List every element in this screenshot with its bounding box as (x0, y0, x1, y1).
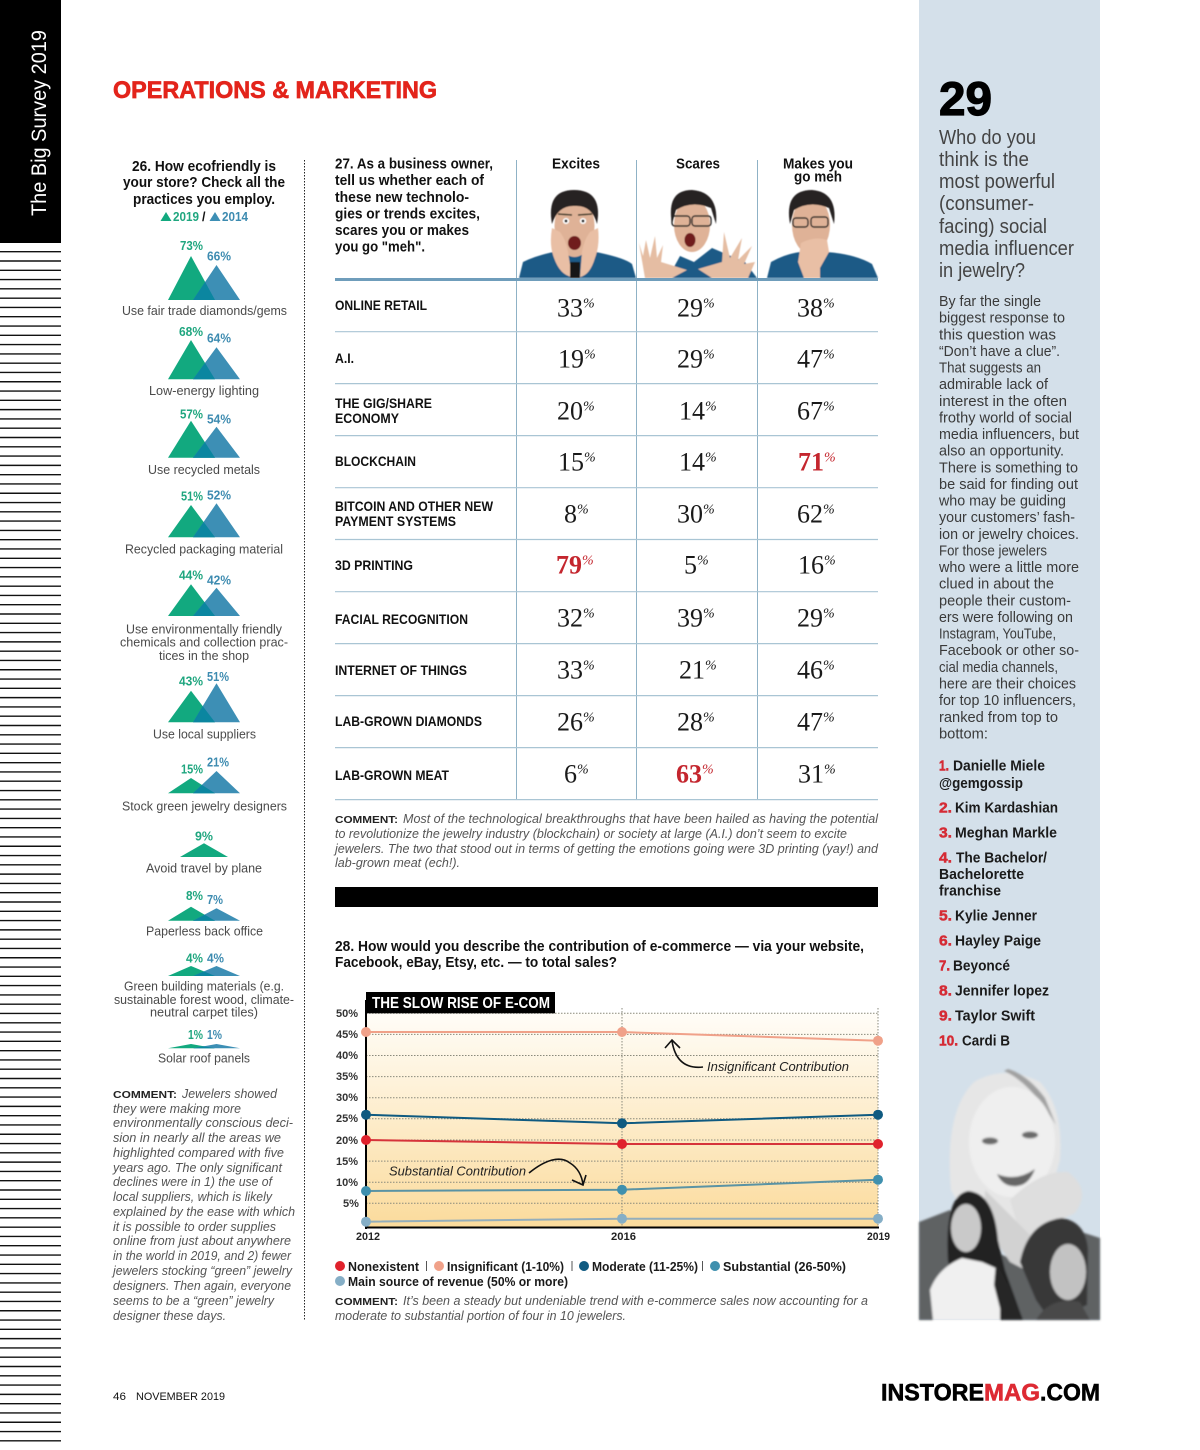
ranked list of influencers: @gemgossip (939, 776, 1023, 792)
item: paperless office: Paperless back office (146, 923, 263, 938)
side tab: The Big Survey 2019: The Big Survey 2019 (28, 30, 51, 216)
ranked list of influencers: 4. (939, 851, 952, 867)
comment: question 26: years ago. The only significant (112, 1160, 283, 1175)
heading: question 28: 28. How would you describe the contribution of e-commerce — via your website, (335, 938, 864, 955)
second portrait (947, 1191, 1023, 1320)
heading: question 27 (335, 156, 493, 256)
series: nonexistent (361, 1135, 883, 1149)
item: green building materials: 4% (186, 951, 203, 966)
sidebar question: in jewelry? (939, 260, 1025, 282)
comment: question 28: COMMENT: (335, 1296, 398, 1308)
series: substantial (361, 1175, 883, 1196)
row: gig economy: ECONOMY (335, 410, 400, 426)
chart legend: Moderate (11-25%) (592, 1259, 698, 1274)
x axis labels: 2012 (356, 1231, 380, 1243)
ranked list of influencers: 9. (939, 1009, 952, 1025)
row: online retail: ONLINE RETAIL (335, 297, 427, 313)
comment: question 26: in the world in 2019, and 2) fewer (113, 1248, 292, 1263)
item: recycled metals: 54% (207, 411, 231, 426)
sidebar body text: clued in about the (939, 577, 1054, 593)
item: green jewelry designers: 15% (181, 761, 203, 776)
sidebar body text: your customers’ fash- (939, 510, 1075, 526)
row: A.I.: % (703, 348, 715, 362)
ranked list of influencers: Danielle Miele (953, 759, 1045, 775)
row: facial recognition: 29 (797, 604, 823, 632)
item: fair trade: 73% (180, 238, 203, 253)
sidebar body text: also an opportunity. (939, 444, 1064, 460)
item: eco-friendly chemicals: chemicals and collection prac- (120, 635, 288, 650)
row: gig economy: 67 (797, 396, 823, 426)
item: low-energy lighting: 64% (207, 331, 231, 346)
ranked list of influencers: Hayley Paige (955, 934, 1041, 950)
panel: question 26 eco practices (111, 158, 295, 1323)
ranked list of influencers: 2. (939, 801, 952, 817)
comment: question 27: to revolutionize the jewelry industry (blockchain) or society at large (A.I.) don’t seem to excite (335, 826, 847, 841)
item: recycled metals: 57% (180, 406, 203, 421)
ranked list of influencers: 3. (939, 826, 952, 842)
sidebar body text: this question was (939, 327, 1056, 343)
row: lab-grown diamonds: 26 (557, 708, 583, 736)
item: low-energy lighting: Low-energy lighting (149, 383, 259, 398)
annotation: substantial contribution: Substantial Contribution (389, 1164, 526, 1178)
row: online retail: % (703, 296, 715, 312)
row: 3D printing: % (824, 554, 836, 568)
sidebar body text: biggest response to (939, 311, 1065, 327)
sidebar question: most powerful (939, 171, 1055, 193)
row: lab-grown meat: LAB-GROWN MEAT (335, 767, 449, 783)
row: blockchain: BLOCKCHAIN (335, 453, 416, 469)
row: gig economy: THE GIG/SHARE (335, 395, 432, 411)
sidebar body text: who were a little more (938, 560, 1079, 576)
top portrait face (969, 1087, 1055, 1197)
row: online retail: 29 (677, 294, 703, 322)
comment: question 26: declines were in 1) the use of (113, 1174, 273, 1189)
sidebar body text: ranked from top to (939, 710, 1058, 726)
y axis labels: 5% (343, 1198, 359, 1210)
row: A.I.: % (823, 348, 835, 362)
item: eco-friendly chemicals: tices in the shop (159, 648, 249, 663)
sidebar body text: interest in the often (939, 394, 1067, 410)
item: paperless office (146, 888, 263, 938)
ranked list of influencers: 1. (939, 759, 949, 775)
footer: website: INSTORE (881, 1380, 984, 1406)
item: low-energy lighting (149, 324, 259, 398)
row: gig economy: % (583, 400, 595, 414)
ranked list of influencers: 7. (939, 959, 950, 975)
ranked list of influencers: Cardi B (962, 1034, 1010, 1050)
item: solar roof panels: 1% (207, 1027, 222, 1042)
legend: 2019 and 2014: 2014 (222, 209, 249, 224)
item: green building materials: 4% (207, 951, 224, 966)
row: blockchain: 71 (798, 448, 824, 476)
row: online retail: % (583, 296, 595, 312)
sidebar body text: be said for finding out (939, 477, 1078, 493)
row: lab-grown diamonds (335, 708, 835, 736)
row: online retail (335, 294, 835, 322)
comment: question 26: jewelers stocking “green” jewelry (111, 1263, 293, 1278)
x axis labels: 2019 (867, 1231, 890, 1243)
item: paperless office: 8% (186, 888, 203, 903)
heading: question 27: gies or trends excites, (335, 206, 480, 222)
item: recycled metals (148, 406, 260, 477)
row: facial recognition (335, 604, 835, 632)
comment: question 28: It’s been a steady but undeniable trend with e-commerce sales now accounting for a (403, 1293, 868, 1308)
ranked list of influencers: 8. (939, 984, 952, 1000)
item: green building materials: neutral carpet tiles) (150, 1005, 258, 1020)
row: blockchain: % (705, 450, 717, 466)
sidebar body text: That suggests an (939, 360, 1041, 376)
line chart: slow rise of e-com (336, 992, 890, 1243)
row: 3D printing: 16 (798, 550, 824, 580)
row: online retail: % (823, 296, 835, 312)
item: avoid plane travel (146, 829, 262, 876)
sidebar body text: ion or jewelry choices. (939, 527, 1079, 543)
column header: makes you go meh: Makes you (783, 156, 853, 172)
ranked list of influencers: 6. (939, 934, 952, 950)
item: avoid plane travel: 9% (195, 829, 213, 844)
comment: question 26: it is possible to order supplies (113, 1219, 276, 1234)
ranked list of influencers: The Bachelor/ (956, 851, 1047, 867)
item: fair trade: Use fair trade diamonds/gems (122, 303, 287, 318)
photo: unimpressed man (767, 190, 878, 278)
x axis labels: 2016 (611, 1231, 636, 1243)
row: A.I. (335, 344, 835, 374)
row: facial recognition: FACIAL RECOGNITION (335, 611, 468, 627)
item: local suppliers: 43% (179, 674, 203, 689)
panel: question 27 technology table (333, 156, 879, 870)
y axis labels: 45% (336, 1029, 358, 1041)
ranked list of influencers: Beyoncé (953, 959, 1010, 975)
ranked list of influencers: 5. (939, 909, 952, 925)
row: lab-grown diamonds: % (703, 710, 715, 726)
comment: question 26: Jewelers showed (181, 1086, 278, 1101)
footer: website (881, 1380, 1100, 1406)
item: recycled packaging: Recycled packaging material (125, 541, 283, 556)
ranked list of influencers: Meghan Markle (955, 826, 1057, 842)
comment: question 26: online from just about anywhere (113, 1233, 291, 1248)
sidebar body text: Facebook or other so- (939, 643, 1079, 659)
y axis labels: 25% (336, 1113, 358, 1125)
sidebar body text: There is something to (939, 460, 1078, 476)
ranked list of influencers: Jennifer lopez (955, 984, 1049, 1000)
comment: question 26: designers. Then again, everyone (113, 1278, 291, 1293)
row: 3D printing: % (582, 554, 594, 568)
item: green jewelry designers: Stock green jewelry designers (122, 799, 287, 814)
sidebar body text: cial media channels, (939, 660, 1058, 676)
item: green building materials (114, 951, 294, 1020)
row: bitcoin: % (703, 502, 715, 518)
y axis labels: 10% (336, 1177, 358, 1189)
ranked list of influencers (939, 759, 1058, 1050)
ranked list of influencers: Kim Kardashian (955, 801, 1058, 817)
photo: scared man (639, 190, 757, 278)
row: bitcoin: PAYMENT SYSTEMS (335, 513, 456, 529)
row: lab-grown meat: % (824, 762, 836, 778)
heading: question 26: practices you employ. (133, 191, 275, 208)
row: lab-grown diamonds: 47 (797, 708, 823, 736)
row: bitcoin: 8 (564, 500, 577, 528)
heading: question 27: these new technolo- (335, 189, 469, 206)
page title: OPERATIONS & MARKETING (113, 77, 437, 104)
comment: question 26: COMMENT: (113, 1089, 177, 1101)
annotation: insignificant contribution: Insignificant Contribution (707, 1059, 849, 1074)
y axis labels: 50% (336, 1008, 358, 1020)
comment: question 28 (335, 1293, 868, 1323)
comment: question 26 (111, 1086, 295, 1323)
row: blockchain: % (824, 450, 836, 466)
row: internet of things: % (583, 658, 595, 674)
item: recycled packaging: 52% (207, 487, 231, 502)
heading: question 27: 27. As a business owner, (335, 156, 493, 172)
item: fair trade (122, 238, 287, 318)
sidebar body text: frothy world of social (939, 410, 1072, 426)
sidebar body text: For those jewelers (939, 544, 1047, 560)
footer: website: MAG (984, 1380, 1040, 1406)
row: bitcoin: % (577, 502, 589, 518)
item: recycled packaging: 51% (181, 489, 203, 504)
y axis labels: 20% (336, 1135, 358, 1147)
comment: question 26: seems to be a “green” jewelry (113, 1293, 275, 1308)
column header: excites: Excites (552, 156, 600, 172)
row: gig economy: 14 (679, 396, 705, 426)
top portrait hair (950, 1073, 1061, 1230)
row: facial recognition: 39 (677, 604, 703, 632)
chart legend: Main source of revenue (50% or more) (348, 1274, 568, 1289)
row: gig economy: 20 (557, 396, 583, 426)
sidebar body text: ers were following on (939, 610, 1073, 626)
footer: folio: NOVEMBER 2019 (136, 1391, 225, 1403)
item: avoid plane travel: Avoid travel by plane (146, 861, 262, 876)
row: A.I.: 47 (797, 344, 823, 374)
sidebar question: Who do you (939, 127, 1036, 149)
comment: question 27: Most of the technological breakthroughs that have been hailed as having the potential (403, 811, 879, 826)
row: lab-grown diamonds: % (583, 710, 595, 726)
row: bitcoin: 30 (677, 500, 703, 528)
footer: folio: 46 (113, 1391, 126, 1403)
comment: question 27: lab-grown meat (ech!). (335, 855, 460, 870)
row: 3D printing: 79 (556, 550, 582, 580)
item: green jewelry designers (122, 755, 287, 814)
item: solar roof panels: Solar roof panels (158, 1051, 250, 1066)
item: local suppliers: 51% (207, 669, 229, 684)
row: online retail: 33 (557, 294, 583, 322)
item: green jewelry designers: 21% (207, 755, 229, 770)
item: eco-friendly chemicals (120, 567, 288, 663)
heading: question 27: you go "meh". (335, 238, 425, 256)
heading: question 26 (123, 158, 285, 208)
chart legend: Substantial (26-50%) (723, 1259, 846, 1274)
sidebar body text: people their custom- (939, 593, 1071, 609)
sidebar body text: here are their choices (939, 676, 1076, 692)
y axis labels (336, 1008, 359, 1210)
sidebar body text: media influencers, but (939, 427, 1079, 443)
series: main source of revenue (361, 1214, 883, 1227)
footer: website: .COM (1040, 1380, 1100, 1406)
row: facial recognition: 32 (557, 604, 583, 632)
row: lab-grown meat: % (577, 762, 589, 778)
sidebar question: think is the (939, 149, 1029, 171)
row: gig economy: % (823, 400, 835, 414)
panel: question 28 e-commerce (335, 938, 890, 1323)
row: internet of things: 33 (557, 656, 583, 684)
row: 3D printing: 3D PRINTING (335, 557, 413, 573)
row: internet of things: 46 (797, 656, 823, 684)
comment: question 26: designer these days. (113, 1308, 226, 1323)
row: bitcoin: % (823, 502, 835, 518)
heading: question 27: scares you or makes (335, 222, 469, 239)
legend: 2019 and 2014: / (202, 210, 206, 224)
sidebar body text: who may be guiding (938, 494, 1066, 510)
comment: question 26: local suppliers, which is likely (113, 1189, 273, 1204)
sidebar body text: admirable lack of (939, 377, 1049, 393)
row: A.I.: % (584, 348, 596, 362)
photo: excited man (519, 190, 636, 278)
row: internet of things: % (823, 658, 835, 674)
y axis labels: 40% (336, 1050, 358, 1062)
row: lab-grown meat: 31 (798, 760, 824, 788)
annotation: insignificant contribution (665, 1040, 849, 1074)
row: facial recognition: % (703, 606, 715, 622)
item: recycled metals: Use recycled metals (148, 462, 260, 477)
item: eco-friendly chemicals: 42% (207, 572, 231, 587)
row: internet of things: % (705, 658, 717, 674)
item: recycled packaging (125, 487, 283, 556)
row: lab-grown diamonds: LAB-GROWN DIAMONDS (335, 713, 482, 729)
legend: 2019 and 2014 (160, 209, 249, 224)
column header: makes you go meh (783, 156, 853, 186)
ranked list of influencers: franchise (939, 884, 1001, 900)
column header: scares: Scares (676, 156, 720, 172)
row: lab-grown diamonds: % (823, 710, 835, 726)
item: solar roof panels (158, 1027, 250, 1066)
side tab: The Big Survey 2019 (0, 0, 61, 243)
third portrait (1020, 1218, 1088, 1320)
row: lab-grown meat (335, 760, 836, 788)
comment: question 26: explained by the ease with which (113, 1204, 295, 1219)
heading: question 28: Facebook, eBay, Etsy, etc. — to total sales? (335, 954, 617, 971)
row: gig economy (335, 395, 835, 426)
row: blockchain: 14 (679, 448, 705, 476)
chart legend (335, 1259, 846, 1289)
comment: question 26: they were making more (113, 1101, 241, 1116)
heading: question 26: your store? Check all the (123, 174, 285, 191)
row: blockchain: 15 (558, 448, 584, 476)
heading: question 27: tell us whether each of (335, 172, 485, 189)
row: bitcoin: 62 (797, 500, 823, 528)
row: A.I.: 19 (558, 344, 584, 374)
row: A.I.: A.I. (335, 350, 354, 366)
sidebar number 29: 29 (939, 72, 992, 125)
item: local suppliers (153, 669, 256, 741)
item: fair trade: 66% (207, 249, 231, 264)
chart title (366, 992, 555, 1013)
panel: sidebar question 29 (919, 0, 1100, 1320)
sidebar question: media influencer (939, 238, 1074, 260)
sidebar body text (938, 294, 1079, 742)
row: facial recognition: % (823, 606, 835, 622)
row: internet of things: INTERNET OF THINGS (335, 662, 467, 678)
row: facial recognition: % (583, 606, 595, 622)
row: A.I.: 29 (677, 344, 703, 374)
chart legend: Insignificant (1-10%) (447, 1259, 564, 1274)
heading: question 26: 26. How ecofriendly is (132, 158, 276, 175)
legend: 2019 and 2014: 2019 (173, 209, 199, 224)
item: eco-friendly chemicals: Use environmentally friendly (126, 621, 282, 636)
photo collage of influencers (919, 1069, 1100, 1320)
chart title: THE SLOW RISE OF E-COM (372, 995, 550, 1012)
item: low-energy lighting: 68% (179, 324, 203, 339)
row: blockchain (335, 448, 836, 476)
row: 3D printing: 5 (684, 550, 697, 580)
item: green building materials: Green building materials (e.g. (124, 979, 284, 994)
row: lab-grown diamonds: 28 (677, 708, 703, 736)
comment: question 26: highlighted compared with five (113, 1145, 284, 1160)
y axis labels: 15% (336, 1156, 358, 1168)
row: 3D printing: % (697, 554, 709, 568)
row: internet of things: 21 (679, 656, 705, 684)
dark jacket of top portrait (919, 1210, 1100, 1320)
item: green building materials: sustainable forest wood, climate- (114, 992, 294, 1007)
row: bitcoin (335, 498, 835, 529)
y axis labels: 30% (336, 1092, 358, 1104)
sidebar body text: “Don’t have a clue”. (939, 344, 1060, 360)
row: lab-grown meat: 63 (676, 760, 702, 788)
comment: question 28: moderate to substantial portion of four in 10 jewelers. (335, 1308, 626, 1323)
item: eco-friendly chemicals: 44% (179, 567, 203, 582)
chart legend: Nonexistent (348, 1259, 420, 1274)
row: lab-grown meat: 6 (564, 760, 577, 788)
annotation: substantial contribution (389, 1159, 586, 1185)
heading: question 28 (335, 938, 864, 971)
sidebar body text: Instagram, YouTube, (939, 627, 1056, 643)
ranked list of influencers: Kylie Jenner (955, 909, 1037, 925)
ranked list of influencers: 10. (939, 1034, 958, 1050)
ranked list of influencers: Taylor Swift (955, 1009, 1035, 1025)
row: bitcoin: BITCOIN AND OTHER NEW (335, 498, 494, 514)
item: solar roof panels: 1% (188, 1027, 203, 1042)
comment: question 26: sion in nearly all the areas we (113, 1130, 281, 1145)
x axis labels (356, 1231, 890, 1243)
sidebar question: (consumer- (939, 193, 1034, 215)
ranked list of influencers: Bachelorette (939, 867, 1024, 883)
item: local suppliers: Use local suppliers (153, 726, 256, 741)
sidebar question (939, 127, 1074, 282)
sidebar question: facing) social (939, 216, 1047, 238)
item: paperless office: 7% (207, 892, 223, 907)
comment: question 27 (333, 811, 879, 870)
row: gig economy: % (705, 400, 717, 414)
y axis labels: 35% (336, 1071, 358, 1083)
sidebar body text: for top 10 influencers, (939, 693, 1076, 709)
sidebar body text: By far the single (939, 294, 1041, 310)
series: moderate (361, 1110, 883, 1128)
comment: question 27: COMMENT: (335, 814, 398, 826)
row: internet of things (335, 656, 835, 684)
column header: makes you go meh: go meh (794, 168, 842, 186)
comment: question 26: environmentally conscious deci- (113, 1115, 294, 1130)
series: insignificant (361, 1027, 883, 1046)
comment: question 27: jewelers. The two that stood out in terms of getting the emotions going were 3D printing (yay!) and (333, 841, 879, 856)
row: blockchain: % (584, 450, 596, 466)
row: online retail: 38 (797, 294, 823, 322)
row: lab-grown meat: % (702, 762, 714, 778)
sidebar body text: bottom: (939, 726, 988, 742)
row: 3D printing (335, 550, 836, 580)
